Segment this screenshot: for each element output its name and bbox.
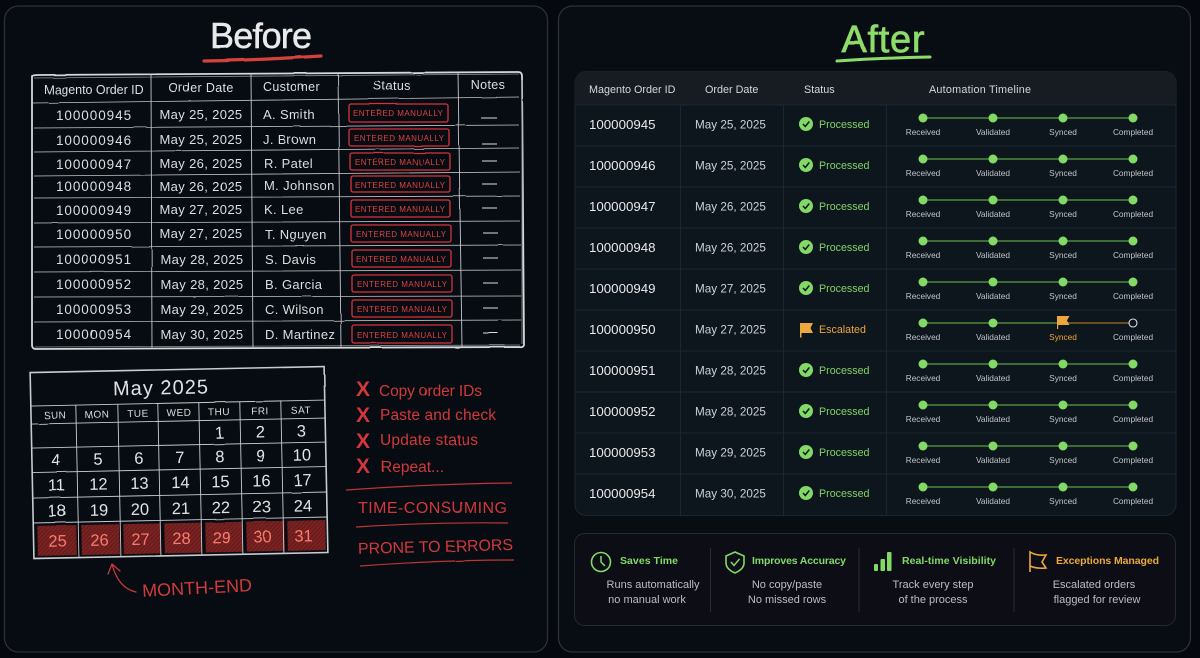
- row 100000951: [589, 360, 1153, 383]
- weekday labels: FRI: [251, 406, 269, 418]
- row 100000952: 100000952: [589, 404, 656, 419]
- weekday labels: MON: [84, 409, 110, 421]
- row 100000953: May 29, 2025: [161, 302, 243, 317]
- row 100000948: [589, 236, 1153, 260]
- row 100000951: May 28, 2025: [161, 252, 243, 267]
- calendar title: May 2025: [113, 376, 208, 400]
- dates: 7: [175, 449, 185, 467]
- row 100000952: [56, 275, 498, 292]
- row 100000952: Received: [906, 414, 941, 424]
- row 100000953: Completed: [1113, 455, 1153, 465]
- table header: Automation Timeline: [929, 84, 1031, 96]
- row 100000947: 100000947: [56, 157, 132, 172]
- benefit: exceptions managed: Escalated orders: [1053, 579, 1136, 591]
- benefit: saves time: Saves Time: [620, 555, 678, 567]
- row 100000954: [56, 325, 498, 343]
- row 100000945: ENTERED MANUALLY: [353, 109, 444, 118]
- dates: 6: [134, 450, 144, 468]
- label: month-end: MONTH-END: [142, 575, 253, 601]
- row 100000945: [589, 114, 1153, 137]
- row 100000947: Received: [906, 209, 941, 219]
- row 100000950 escalated: Synced: [1049, 332, 1077, 342]
- row 100000952: Synced: [1049, 414, 1077, 424]
- benefit: improves accuracy: [726, 552, 846, 606]
- row 100000948: May 26, 2025: [695, 242, 766, 254]
- row 100000954: ENTERED MANUALLY: [357, 331, 448, 340]
- heading: After: After: [842, 19, 925, 61]
- month-end highlighted cells: [37, 520, 326, 556]
- row 100000952: Processed: [819, 406, 870, 418]
- row 100000947: R. Patel: [264, 156, 313, 171]
- table header: Magento Order ID: [589, 84, 676, 96]
- row 100000953: Synced: [1049, 455, 1077, 465]
- dates: 11: [48, 476, 65, 495]
- row 100000947: ENTERED MANUALLY: [355, 158, 446, 167]
- row 100000953: May 29, 2025: [695, 446, 766, 460]
- row 100000947: May 26, 2025: [160, 156, 242, 171]
- row 100000948: 100000948: [56, 179, 132, 194]
- row 100000946: Completed: [1113, 168, 1153, 178]
- table header: Notes: [471, 78, 505, 92]
- row 100000945: A. Smith: [263, 107, 315, 122]
- table header: Order Date: [705, 84, 758, 96]
- benefit: real-time visibility: [874, 552, 996, 606]
- dates: 25: [48, 532, 67, 551]
- row 100000949: May 27, 2025: [160, 202, 242, 217]
- dates: 5: [93, 451, 103, 469]
- row 100000949: May 27, 2025: [695, 282, 766, 296]
- row 100000950: May 27, 2025: [160, 226, 242, 241]
- row 100000948: Synced: [1049, 250, 1077, 260]
- dates: 3: [297, 422, 306, 441]
- row 100000949: Synced: [1049, 291, 1077, 301]
- row 100000954: D. Martinez: [265, 327, 335, 342]
- list: manual steps: X: [356, 404, 370, 427]
- calendar grid: [30, 367, 328, 559]
- row 100000951: Processed: [819, 365, 870, 377]
- dates: 24: [294, 497, 312, 516]
- row 100000953: ENTERED MANUALLY: [357, 305, 448, 314]
- hand-drawn calendar: [30, 367, 328, 559]
- row 100000949: Received: [906, 291, 941, 301]
- dates: 19: [90, 501, 108, 520]
- benefit: exceptions managed: flagged for review: [1054, 594, 1140, 606]
- benefit: exceptions managed: [1030, 552, 1159, 606]
- row 100000945: Processed: [819, 119, 870, 131]
- row 100000951: Completed: [1113, 373, 1153, 383]
- row 100000945: [56, 104, 497, 123]
- benefit: improves accuracy: No missed rows: [748, 594, 827, 606]
- benefit: real-time visibility: Track every step: [893, 579, 973, 591]
- row 100000950 escalated: 100000950: [589, 322, 656, 337]
- row 100000949: 100000949: [56, 203, 132, 218]
- row 100000951: Synced: [1049, 373, 1077, 383]
- row 100000954: [589, 482, 1153, 506]
- row 100000946: [56, 129, 497, 148]
- row 100000949: ENTERED MANUALLY: [355, 205, 446, 214]
- row 100000954: Completed: [1113, 496, 1153, 506]
- callout: time-consuming and errors: TIME-CONSUMING: [358, 500, 507, 517]
- row 100000951: Validated: [976, 373, 1010, 383]
- row 100000953: Received: [906, 455, 941, 465]
- row 100000948: 100000948: [589, 240, 656, 255]
- list: manual steps: X: [356, 430, 370, 453]
- dates: 12: [89, 475, 108, 494]
- row 100000945: May 25, 2025: [160, 107, 242, 122]
- row 100000952: Validated: [976, 414, 1010, 424]
- row 100000951: S. Davis: [265, 252, 316, 267]
- dates: 20: [131, 501, 149, 519]
- row 100000952: Completed: [1113, 414, 1153, 424]
- dates: 17: [293, 471, 312, 490]
- weekday labels: SAT: [291, 405, 311, 417]
- row 100000950 escalated: May 27, 2025: [695, 324, 766, 336]
- row 100000946: J. Brown: [263, 132, 316, 147]
- row 100000947: [589, 196, 1153, 219]
- list: manual steps: Copy order IDs: [379, 383, 482, 400]
- row 100000954: 100000954: [589, 486, 656, 501]
- dates: 1: [215, 424, 224, 442]
- row 100000948: ENTERED MANUALLY: [355, 181, 446, 190]
- weekday labels: WED: [166, 408, 192, 419]
- table header: Order Date: [168, 81, 234, 95]
- table header: [44, 78, 505, 97]
- dates: 8: [215, 448, 225, 466]
- row 100000948: May 26, 2025: [160, 179, 242, 194]
- dates: 18: [48, 502, 66, 521]
- table header: [589, 84, 1031, 96]
- benefit: real-time visibility: Real-time Visibility: [902, 555, 996, 567]
- row 100000945: 100000945: [589, 117, 656, 132]
- row 100000946: May 25, 2025: [160, 132, 242, 147]
- row 100000948: Processed: [819, 242, 870, 254]
- dates: 4: [51, 451, 61, 470]
- table header: Customer: [263, 80, 320, 94]
- row 100000945: Validated: [976, 127, 1010, 137]
- dates: 29: [212, 529, 231, 547]
- row 100000952: May 28, 2025: [695, 406, 766, 418]
- benefit: saves time: [592, 552, 700, 606]
- row 100000953: 100000953: [56, 302, 132, 317]
- row 100000954: May 30, 2025: [695, 488, 766, 500]
- row 100000950 escalated: Validated: [976, 332, 1010, 342]
- row 100000946: 100000946: [56, 133, 132, 148]
- table header: Status: [373, 79, 411, 93]
- callout: time-consuming and errors: PRONE TO ERRORS: [358, 537, 513, 558]
- row 100000953: [589, 442, 1153, 465]
- row 100000949: Validated: [976, 291, 1010, 301]
- orders table: [575, 72, 1176, 516]
- row 100000949: 100000949: [589, 281, 656, 296]
- row 100000950: [56, 225, 498, 242]
- callout: time-consuming and errors: [346, 483, 514, 566]
- dates: 21: [172, 500, 190, 518]
- row 100000945: May 25, 2025: [695, 118, 766, 132]
- table header: Status: [804, 84, 835, 96]
- hand-drawn orders table: [32, 72, 524, 349]
- panel: after: [558, 6, 1190, 652]
- dates: 9: [256, 447, 266, 465]
- row 100000953: [56, 300, 498, 317]
- row 100000945: Received: [906, 127, 941, 137]
- row 100000949: Completed: [1113, 291, 1153, 301]
- row 100000948: Received: [906, 250, 941, 260]
- benefit: saves time: no manual work: [608, 594, 686, 606]
- row 100000952: ENTERED MANUALLY: [357, 280, 448, 289]
- heading: Before: Before: [210, 15, 312, 56]
- row 100000951: 100000951: [589, 363, 656, 378]
- list: manual steps: Update status: [380, 432, 478, 449]
- panel: before: [4, 6, 548, 652]
- benefit: exceptions managed: Exceptions Managed: [1056, 555, 1159, 567]
- row 100000946: 100000946: [589, 158, 656, 173]
- row 100000954: Received: [906, 496, 941, 506]
- list: manual steps: X: [356, 455, 370, 478]
- row 100000946: ENTERED MANUALLY: [354, 134, 445, 143]
- row 100000946: May 25, 2025: [695, 160, 766, 172]
- row 100000951: [56, 250, 498, 267]
- dates: 14: [171, 474, 190, 492]
- dates: 31: [294, 527, 313, 546]
- dates: [46, 422, 313, 551]
- row 100000945: 100000945: [56, 108, 132, 123]
- row 100000950: 100000950: [56, 227, 132, 242]
- row 100000952: May 28, 2025: [161, 277, 243, 292]
- table frame and grid: [32, 72, 524, 349]
- benefits panel: [574, 534, 1176, 626]
- benefit: saves time: Runs automatically: [607, 579, 700, 591]
- benefit: improves accuracy: No copy/paste: [752, 579, 822, 591]
- row 100000953: C. Wilson: [265, 302, 324, 317]
- row 100000948: [56, 176, 497, 194]
- list: manual steps: Paste and check: [380, 407, 496, 424]
- weekday labels: THU: [208, 407, 230, 418]
- row 100000949: K. Lee: [264, 202, 304, 217]
- dates: 15: [211, 473, 230, 491]
- dates: 13: [130, 475, 149, 493]
- row 100000951: 100000951: [56, 252, 132, 267]
- row 100000954: Synced: [1049, 496, 1077, 506]
- row 100000954: May 30, 2025: [161, 327, 243, 342]
- row 100000945: Completed: [1113, 127, 1153, 137]
- row 100000948: Completed: [1113, 250, 1153, 260]
- benefit: improves accuracy: Improves Accuracy: [752, 555, 846, 567]
- row 100000950 escalated: Received: [906, 332, 941, 342]
- row 100000948: M. Johnson: [264, 178, 335, 193]
- row 100000947: [56, 153, 497, 172]
- row 100000947: Synced: [1049, 209, 1077, 219]
- row 100000949: [589, 278, 1153, 301]
- row 100000946: Received: [906, 168, 941, 178]
- row 100000953: Processed: [819, 447, 870, 459]
- table header: Magento Order ID: [44, 83, 144, 97]
- row 100000951: ENTERED MANUALLY: [356, 255, 447, 264]
- dates: 22: [212, 499, 230, 517]
- row 100000950: T. Nguyen: [265, 227, 327, 242]
- row 100000950 escalated: Completed: [1113, 332, 1153, 342]
- row 100000947: May 26, 2025: [695, 200, 766, 214]
- dates: 27: [131, 531, 150, 549]
- row 100000951: Received: [906, 373, 941, 383]
- row 100000950: ENTERED MANUALLY: [356, 230, 447, 239]
- row 100000948: Validated: [976, 250, 1010, 260]
- benefit: real-time visibility: of the process: [898, 594, 968, 606]
- dates: 28: [172, 530, 191, 548]
- row 100000950 escalated: [589, 316, 1153, 342]
- row 100000950 escalated: Escalated: [819, 324, 866, 336]
- list: manual steps: Repeat...: [381, 459, 444, 476]
- row 100000946: Synced: [1049, 168, 1077, 178]
- row 100000954: 100000954: [56, 327, 132, 342]
- dates: 30: [253, 528, 272, 547]
- row 100000951: May 28, 2025: [695, 364, 766, 378]
- row 100000954: Validated: [976, 496, 1010, 506]
- arrow: month-end: [108, 564, 136, 592]
- dates: 2: [256, 423, 265, 441]
- row 100000952: B. Garcia: [265, 277, 323, 292]
- row 100000946: Validated: [976, 168, 1010, 178]
- list: manual steps: X: [356, 378, 370, 401]
- row 100000953: Validated: [976, 455, 1010, 465]
- row 100000954: Processed: [819, 488, 870, 500]
- row 100000952: [589, 400, 1153, 424]
- dates: 10: [293, 446, 311, 465]
- row 100000946: [589, 154, 1153, 178]
- row 100000949: [56, 200, 497, 218]
- dates: 16: [252, 472, 271, 491]
- weekday labels: SUN: [44, 410, 66, 422]
- weekday labels: [44, 405, 311, 422]
- row 100000947: Processed: [819, 201, 870, 213]
- list: manual steps: [356, 378, 496, 478]
- dates: 23: [253, 498, 271, 517]
- row 100000947: 100000947: [589, 199, 656, 214]
- row 100000945: Synced: [1049, 127, 1077, 137]
- row 100000952: 100000952: [56, 277, 132, 292]
- row 100000946: Processed: [819, 160, 870, 172]
- dates: 26: [90, 531, 109, 550]
- row 100000953: 100000953: [589, 445, 656, 460]
- row 100000947: Completed: [1113, 209, 1153, 219]
- row 100000949: Processed: [819, 283, 870, 295]
- weekday labels: TUE: [127, 409, 149, 420]
- row 100000947: Validated: [976, 209, 1010, 219]
